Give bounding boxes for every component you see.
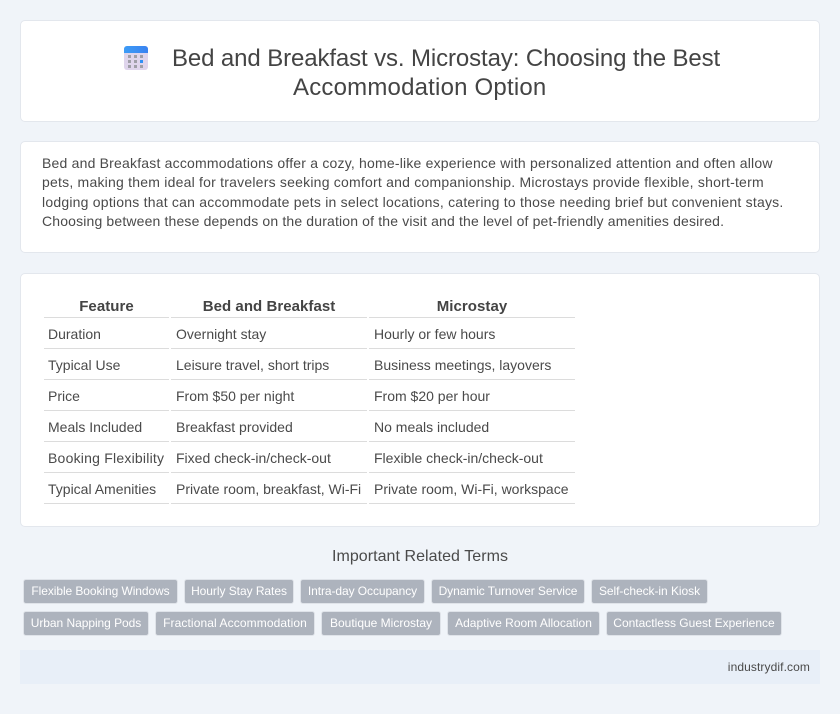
row: duration: Overnight stay [176, 326, 266, 342]
row: meals included: Meals Included [48, 419, 142, 435]
tag: Boutique Microstay [330, 616, 432, 630]
tag: Contactless Guest Experience [613, 616, 775, 630]
intro paragraph: Choosing between these depends on the duration of the visit and the level of pet-friendly amenities desired. [42, 213, 724, 229]
icon: calendar [124, 46, 148, 70]
table header row: Microstay [437, 298, 507, 315]
tag [23, 611, 149, 636]
table header row [79, 298, 508, 315]
row: price: From $20 per hour [374, 388, 490, 404]
row: typical use: Leisure travel, short trips [176, 357, 329, 373]
row: meals included: Breakfast provided [176, 419, 293, 435]
tag: Intra-day Occupancy [308, 584, 417, 598]
footer bar [20, 650, 820, 684]
row: typical use: Business meetings, layovers [374, 357, 551, 373]
intro paragraph: pets, making them ideal for travelers seeking comfort and companionship. Microstays provide flexible, short-term [42, 174, 764, 190]
row: typical use: Typical Use [48, 357, 120, 373]
intro paragraph [42, 155, 784, 229]
row: price: Price [48, 388, 80, 404]
title: Bed and Breakfast vs. Microstay: Choosing the Best [172, 45, 720, 72]
tag [591, 579, 708, 604]
row: typical amenities [48, 481, 568, 497]
row: meals included: No meals included [374, 419, 489, 435]
table header row: Bed and Breakfast [203, 298, 335, 315]
tag: Adaptive Room Allocation [455, 616, 592, 630]
tag [155, 611, 315, 636]
tag [321, 611, 441, 636]
row: price [48, 388, 490, 404]
row: typical amenities: Typical Amenities [48, 481, 156, 497]
tag [23, 579, 178, 604]
related terms tags [23, 579, 782, 636]
tag [184, 579, 294, 604]
footer source text: industrydif.com [728, 660, 810, 674]
intro paragraph: Bed and Breakfast accommodations offer a cozy, home-like experience with personalized attention and often allow [42, 155, 773, 171]
row: booking flexibility: Flexible check-in/check-out [374, 450, 543, 466]
header panel [20, 20, 820, 122]
title [172, 45, 720, 101]
tag: Dynamic Turnover Service [439, 584, 577, 598]
row: meals included [48, 419, 489, 435]
tag: Urban Napping Pods [31, 616, 141, 630]
row: typical amenities: Private room, breakfast, Wi-Fi [176, 481, 361, 497]
row: price: From $50 per night [176, 388, 294, 404]
comparison table [44, 298, 575, 504]
tag [447, 611, 600, 636]
comparison table panel [20, 273, 820, 527]
row: duration [48, 326, 495, 342]
tag: Hourly Stay Rates [191, 584, 287, 598]
tag [300, 579, 425, 604]
tag [431, 579, 585, 604]
table header row: Feature [79, 298, 134, 315]
related terms heading: Important Related Terms [332, 548, 508, 565]
row: duration: Hourly or few hours [374, 326, 495, 342]
intro text panel [20, 141, 820, 253]
title: Accommodation Option [293, 74, 546, 101]
tag [606, 611, 782, 636]
row: booking flexibility: Fixed check-in/check-out [176, 450, 331, 466]
row: booking flexibility: Booking Flexibility [48, 450, 164, 466]
tag: Fractional Accommodation [163, 616, 307, 630]
row: duration: Duration [48, 326, 101, 342]
intro paragraph: lodging options that can accommodate pets in select locations, catering to those needing brief but convenient stays. [42, 194, 784, 210]
row: typical use [48, 357, 551, 373]
row: typical amenities: Private room, Wi-Fi, workspace [374, 481, 568, 497]
tag: Flexible Booking Windows [31, 584, 170, 598]
tag: Self-check-in Kiosk [599, 584, 700, 598]
row: booking flexibility [48, 450, 543, 466]
